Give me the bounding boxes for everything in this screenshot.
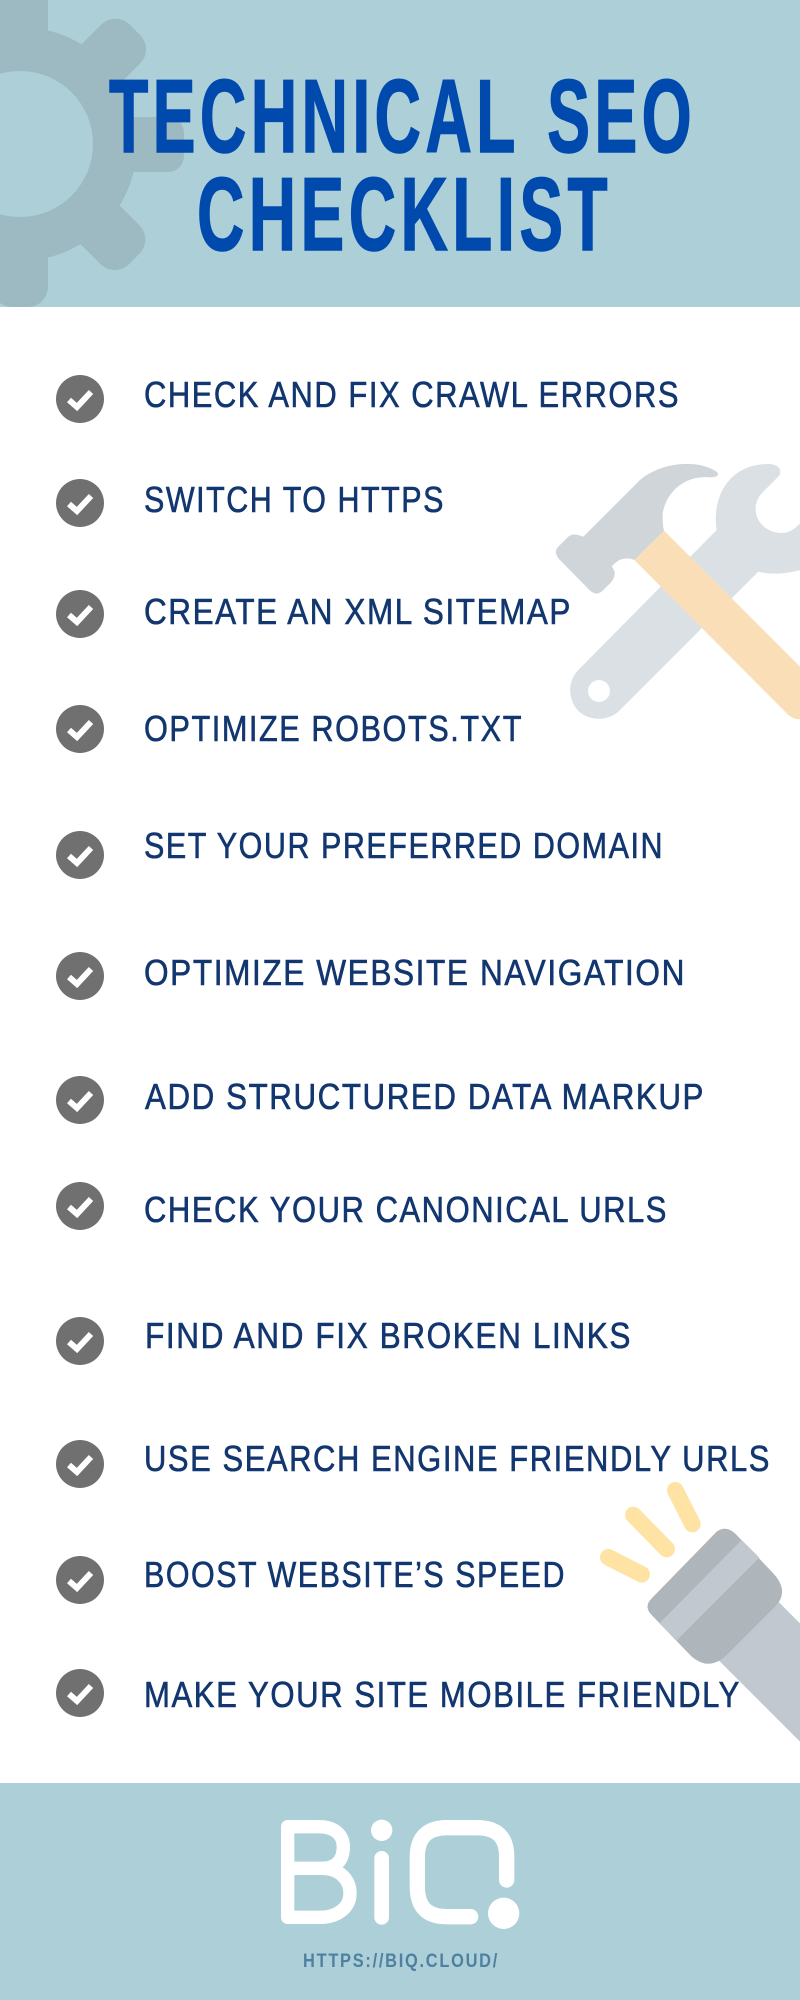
checklist item 6 [56,952,686,1000]
checklist item 6: OPTIMIZE WEBSITE NAVIGATION [144,952,686,993]
checklist item 2: SWITCH TO HTTPS [144,479,445,520]
checklist item 10 [56,1438,771,1488]
checklist item 3: CREATE AN XML SITEMAP [144,591,572,632]
checklist item 3 [56,590,572,638]
checklist item 1: CHECK AND FIX CRAWL ERRORS [144,374,680,415]
checklist item 4: OPTIMIZE ROBOTS.TXT [144,708,523,749]
logo: BiQ [288,1820,519,1929]
footer url: HTTPS://BIQ.CLOUD/ [303,1951,499,1972]
icon: wrench and hammer [556,464,800,719]
checklist item 11: BOOST WEBSITE’S SPEED [144,1554,566,1595]
panel: header band [0,0,800,307]
checklist item 4 [56,705,523,753]
checklist item 7 [56,1076,705,1124]
checklist item 5 [56,825,664,879]
checklist item 9: FIND AND FIX BROKEN LINKS [145,1315,632,1356]
checklist item 2 [56,479,445,527]
checklist item 7: ADD STRUCTURED DATA MARKUP [145,1076,705,1117]
title [109,59,696,273]
checklist item 1 [56,374,680,423]
icon: flashlight [608,1490,800,1768]
checklist item 5: SET YOUR PREFERRED DOMAIN [144,825,664,866]
checklist item 9 [56,1315,632,1365]
checklist item 12 [56,1669,741,1717]
checklist item 11 [56,1554,566,1604]
checklist item 8 [56,1182,668,1230]
icon: gear [0,0,184,307]
panel: footer band [0,1783,800,2000]
checklist item 8: CHECK YOUR CANONICAL URLS [144,1189,668,1230]
